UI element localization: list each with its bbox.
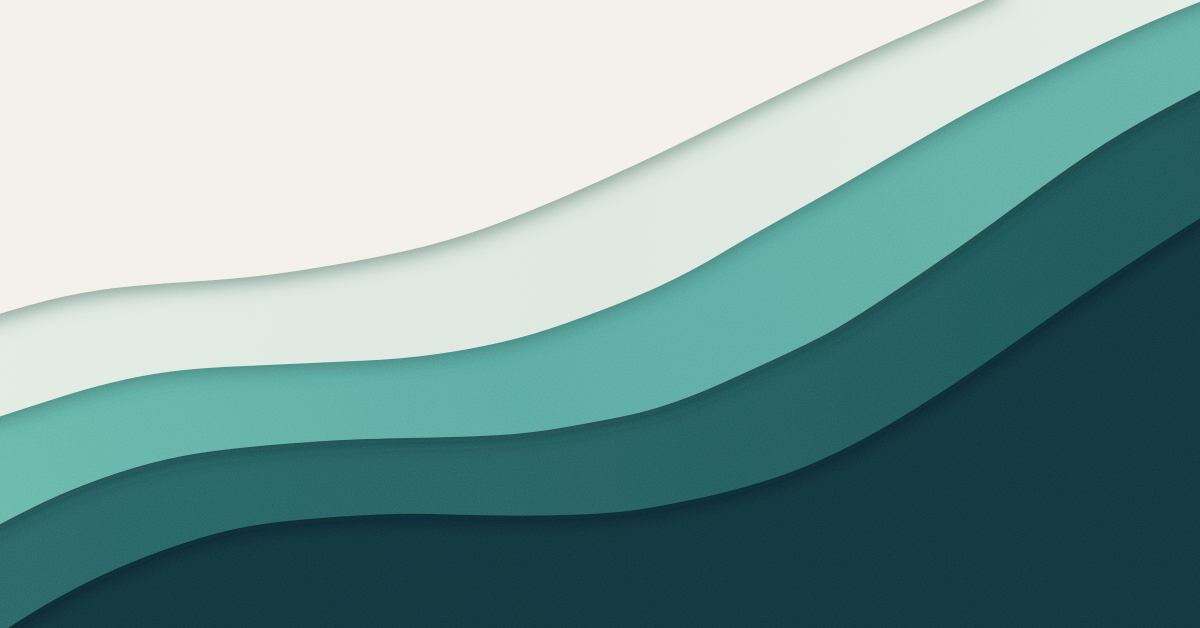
pale sage wave	[0, 0, 1200, 423]
cream top layer	[0, 0, 1000, 320]
